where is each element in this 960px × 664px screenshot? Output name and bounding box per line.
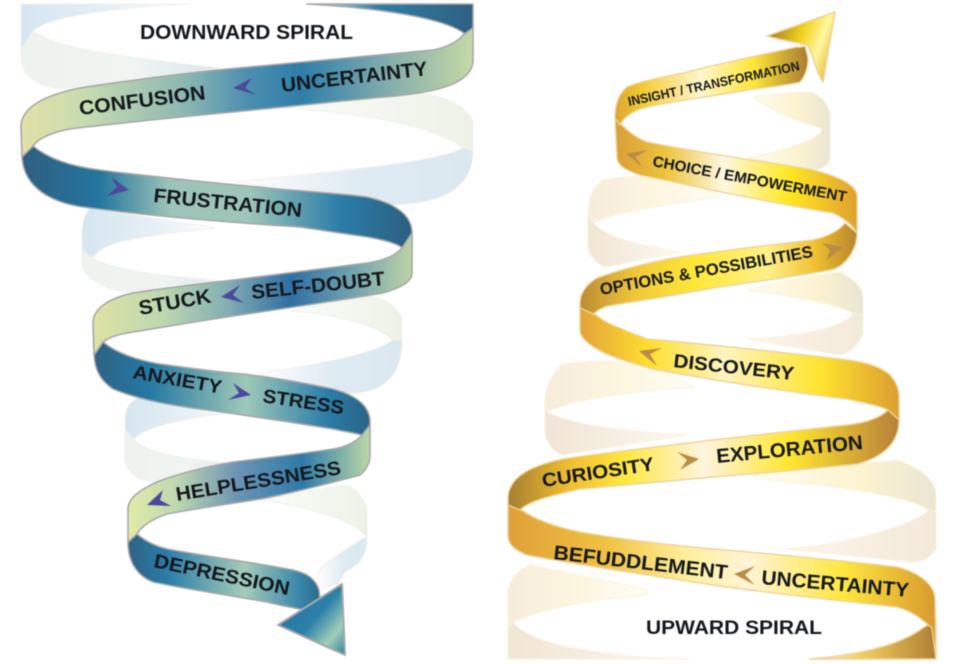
heading: upward spiral: UPWARD SPIRAL — [646, 617, 822, 639]
ribbon: helplessness — [128, 425, 370, 542]
label: insight and transformation: INSIGHT / TRANSFORMATION — [627, 58, 801, 109]
ribbon: frustration — [22, 146, 412, 248]
ribbon: befuddlement and uncertainty — [508, 502, 936, 659]
label: uncertainty: UNCERTAINTY — [280, 58, 429, 97]
label: depression: DEPRESSION — [152, 550, 292, 600]
ribbon: discovery — [580, 305, 899, 422]
panel: upward spiral — [508, 12, 936, 659]
label: stuck: STUCK — [137, 285, 213, 320]
arrowhead: downward — [278, 584, 345, 655]
back ribbons: downward spiral — [21, 4, 473, 588]
ribbon: options and possibilities — [580, 223, 857, 314]
ribbon: stuck and self-doubt — [93, 233, 412, 355]
label: choice and empowerment: CHOICE / EMPOWERMENT — [651, 153, 848, 206]
label: befuddlement: BEFUDDLEMENT — [552, 542, 729, 584]
ribbon: curiosity and exploration — [508, 410, 899, 510]
label: self-doubt: SELF-DOUBT — [250, 268, 386, 304]
label: uncertainty: UNCERTAINTY — [761, 567, 911, 602]
heading: downward spiral: DOWNWARD SPIRAL — [140, 22, 353, 44]
label: anxiety: ANXIETY — [131, 362, 224, 399]
label: options and possibilities: OPTIONS & POSSIBILITIES — [599, 243, 814, 299]
ribbon: confusion and uncertainty — [21, 28, 473, 157]
ribbon: insight and transformation — [615, 46, 808, 125]
label: discovery: DISCOVERY — [672, 351, 795, 385]
ribbon: anxiety and stress — [94, 342, 370, 435]
label: confusion: CONFUSION — [78, 82, 207, 120]
chevrons: upward direction markers — [626, 150, 843, 585]
ribbon: uncertainty top turn — [307, 4, 473, 34]
chevrons: downward direction markers — [107, 78, 256, 506]
ribbon: choice and empowerment — [615, 117, 857, 233]
arrowhead: upward — [767, 12, 835, 82]
label: exploration: EXPLORATION — [715, 432, 864, 468]
panel: downward spiral — [21, 4, 473, 655]
label: helplessness: HELPLESSNESS — [174, 457, 343, 506]
label: frustration: FRUSTRATION — [152, 185, 303, 222]
label: stress: STRESS — [261, 386, 345, 419]
label: curiosity: CURIOSITY — [541, 454, 656, 492]
ribbon: depression — [128, 534, 322, 620]
ribbon: bottom turn — [810, 620, 936, 659]
back ribbons: upward spiral — [508, 92, 936, 659]
